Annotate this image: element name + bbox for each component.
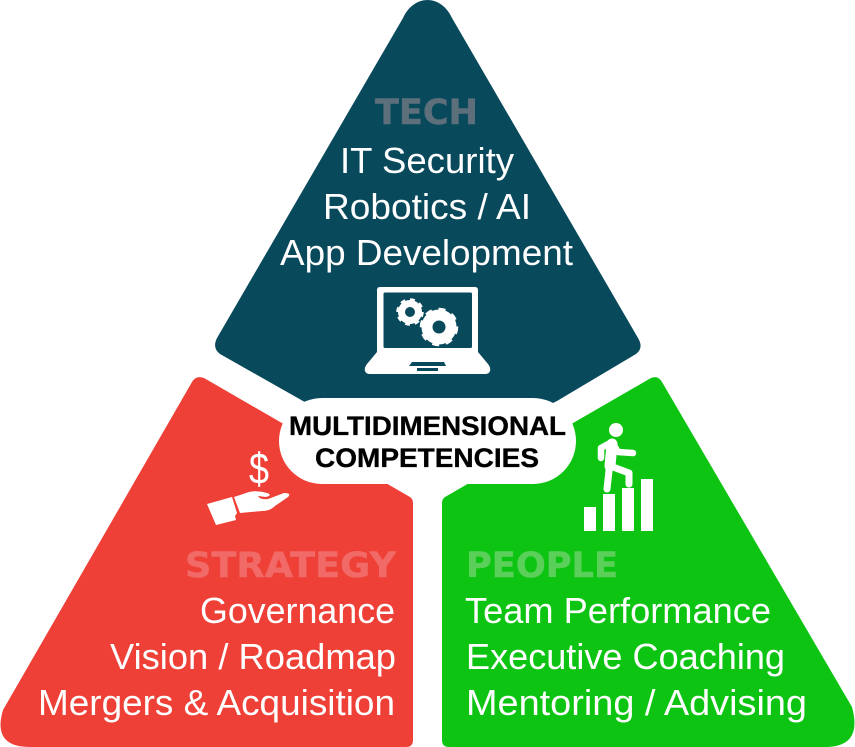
heading: people: PEOPLE — [466, 546, 618, 586]
panel: strategy — [1, 377, 413, 747]
icon: laptop with gears — [365, 287, 490, 374]
icon: hand holding dollar — [207, 444, 289, 525]
tech triangle background — [215, 0, 641, 412]
people shape background — [442, 377, 854, 747]
strategy item list — [38, 590, 396, 723]
strategy shape background — [1, 377, 413, 747]
icon: person climbing steps — [584, 423, 653, 531]
item: it security: IT Security — [340, 140, 514, 181]
center label line 1: MULTIDIMENSIONAL — [289, 411, 566, 441]
item: mentoring and advising: Mentoring / Advising — [466, 682, 807, 723]
item: team performance: Team Performance — [465, 590, 771, 631]
center callout: multidimensional competencies — [279, 398, 576, 484]
center label line 2: COMPETENCIES — [315, 443, 539, 473]
item: executive coaching: Executive Coaching — [466, 636, 785, 677]
item: governance: Governance — [200, 590, 395, 631]
tech item list — [280, 140, 573, 273]
panel: people — [442, 377, 854, 747]
dollar sign: $ — [249, 444, 269, 494]
people item list — [465, 590, 807, 723]
item: robotics and ai: Robotics / AI — [323, 186, 531, 227]
item: vision and roadmap: Vision / Roadmap — [110, 636, 396, 677]
heading: strategy: STRATEGY — [185, 546, 397, 586]
heading: tech: TECH — [375, 93, 478, 133]
item: app development: App Development — [280, 232, 573, 273]
item: mergers and acquisition: Mergers & Acquisition — [38, 682, 395, 723]
panel: tech — [215, 0, 641, 412]
